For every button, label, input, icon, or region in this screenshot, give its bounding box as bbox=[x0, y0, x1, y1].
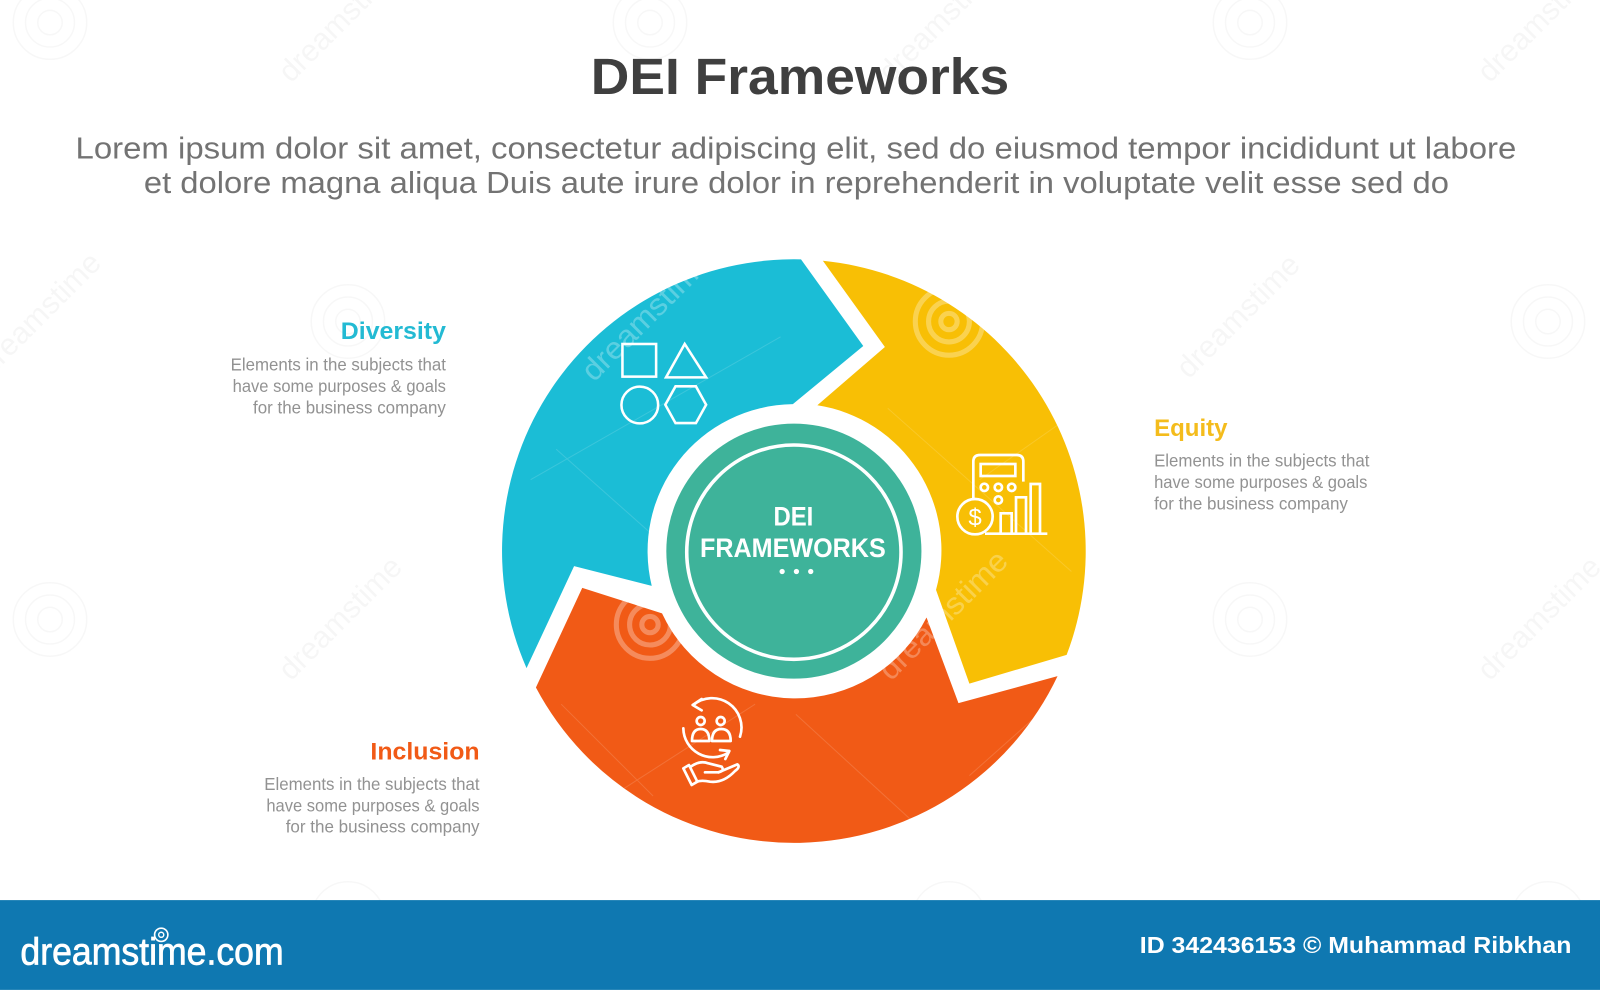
panel: diversity text bbox=[231, 318, 446, 417]
footer band bbox=[0, 900, 1600, 990]
arrow segment: inclusion bbox=[536, 588, 1058, 843]
icon: shapes bbox=[621, 344, 706, 423]
text block: inclusion description: for the business company bbox=[286, 817, 480, 837]
subtitle: et dolore magna aliqua Duis aute irure dolor in reprehenderit in voluptate velit esse sed do bbox=[144, 166, 1449, 200]
panel: equity text bbox=[1154, 415, 1370, 513]
text block: inclusion description: Elements in the subjects that bbox=[264, 774, 480, 794]
panel: inclusion text bbox=[264, 738, 480, 837]
text block: equity description: for the business company bbox=[1154, 493, 1348, 513]
hub label: FRAMEWORKS bbox=[700, 533, 886, 563]
subtitle: Lorem ipsum dolor sit amet, consectetur adipiscing elit, sed do eiusmod tempor incididunt ut labore bbox=[76, 131, 1516, 165]
arrow segment: diversity bbox=[502, 259, 863, 668]
icon: people with hand bbox=[683, 698, 741, 785]
footer credit: ID 342436153 © Muhammad Ribkhan bbox=[1140, 932, 1571, 958]
footer logo: dreamstime.com bbox=[20, 930, 284, 972]
hub label bbox=[700, 502, 886, 563]
icon: calculator and chart bbox=[957, 455, 1047, 534]
icon: calculator and chart: $ bbox=[968, 504, 982, 531]
infographic canvas: dreamstime bbox=[575, 245, 718, 388]
center hub bbox=[666, 424, 921, 679]
text block: inclusion description bbox=[264, 774, 480, 837]
text block: diversity description: for the business company bbox=[253, 397, 446, 417]
text block: equity description: have some purposes & goals bbox=[1154, 472, 1368, 492]
infographic canvas: dreamstime bbox=[1170, 248, 1307, 385]
text block: equity description: Elements in the subjects that bbox=[1154, 450, 1370, 470]
infographic canvas: dreamstime bbox=[272, 550, 409, 687]
title: DEI Frameworks bbox=[591, 48, 1009, 105]
text block: diversity description bbox=[231, 355, 446, 417]
text block: diversity description: have some purposes & goals bbox=[233, 376, 446, 396]
heading: inclusion: Inclusion bbox=[370, 738, 480, 765]
text block: equity description bbox=[1154, 450, 1370, 513]
hub label: DEI bbox=[773, 502, 813, 532]
arrow segment: equity bbox=[817, 261, 1086, 684]
subtitle bbox=[76, 131, 1516, 200]
text block: diversity description: Elements in the subjects that bbox=[231, 355, 446, 375]
infographic canvas: dreamstime bbox=[872, 544, 1015, 687]
heading: diversity: Diversity bbox=[341, 318, 446, 345]
heading: equity: Equity bbox=[1154, 415, 1228, 442]
text block: inclusion description: have some purposes & goals bbox=[266, 795, 480, 815]
